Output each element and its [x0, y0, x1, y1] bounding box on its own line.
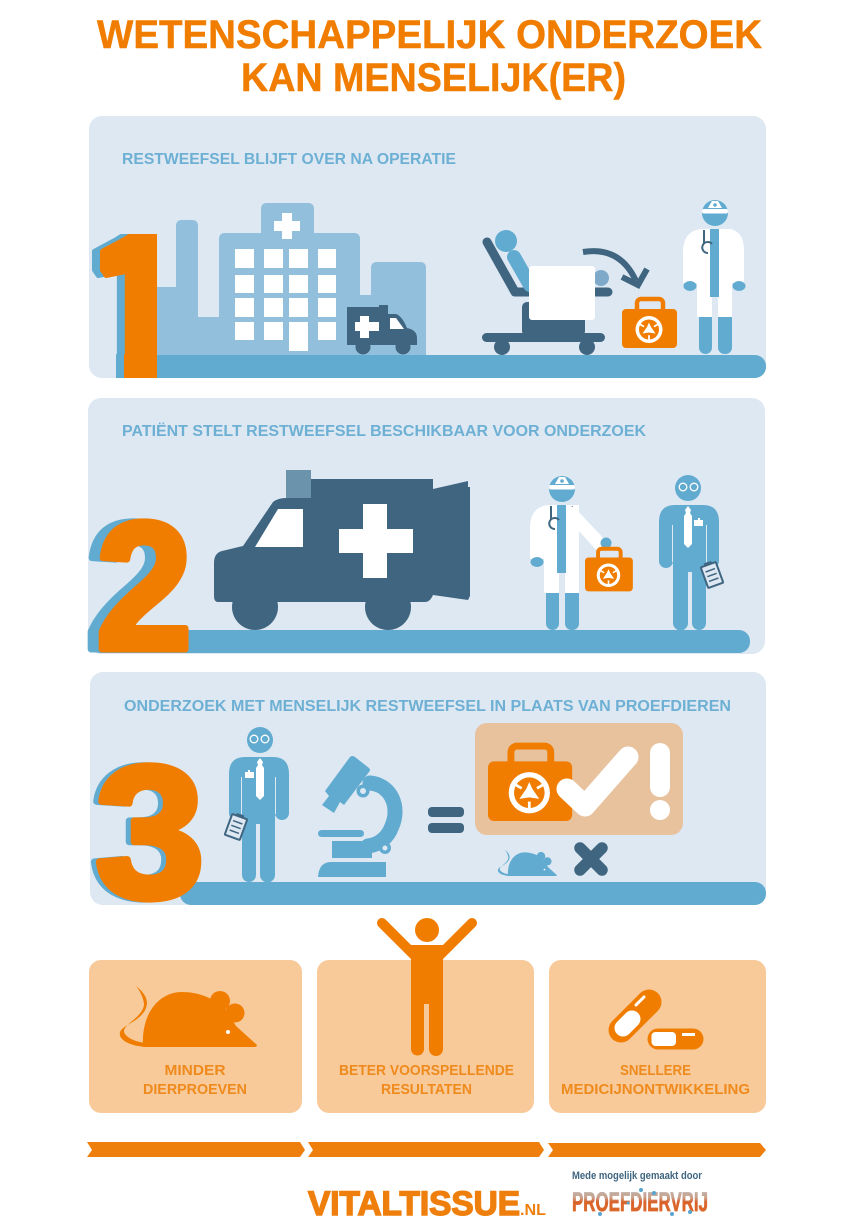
number 2: 2: [96, 484, 192, 688]
icon: recycling case: [488, 746, 572, 821]
equals sign: [428, 807, 464, 833]
number 1: [92, 234, 157, 378]
logo: proefdiervrij: [572, 1187, 708, 1217]
icon: large ambulance: [214, 470, 470, 630]
icon: doctor: [683, 200, 746, 354]
icon: recycling case: [622, 299, 677, 348]
icon: exclamation mark: [650, 743, 670, 820]
icon: researcher: [659, 475, 723, 631]
logo: proefdiervrij: PROEFDIERVRIJ: [572, 1187, 708, 1217]
label: BETER VOORSPELLENDE: [339, 1062, 514, 1079]
number 2: 2: [85, 484, 181, 688]
callout: tissue approved: [475, 723, 683, 835]
label: [339, 1062, 514, 1098]
icon: mouse: [498, 850, 557, 876]
title: [97, 13, 762, 100]
number 3: 3: [95, 727, 205, 937]
heading: step 2: PATIËNT STELT RESTWEEFSEL BESCHIKBAAR VOOR ONDERZOEK: [122, 422, 646, 440]
ground bar 2: [89, 630, 750, 653]
icon: cheering person: [382, 918, 472, 1056]
label: DIERPROEVEN: [143, 1081, 247, 1098]
icon: check mark: [567, 757, 628, 806]
label: [143, 1062, 247, 1098]
ground bar 3: [180, 882, 766, 905]
panel: step 1: [89, 116, 766, 378]
panel: better predictions: [317, 918, 534, 1113]
icon: researcher: [225, 727, 289, 883]
icon: mouse: [120, 986, 257, 1047]
panel: step 2: [85, 398, 765, 688]
panel: less animal testing: [89, 960, 302, 1113]
icon: cross: [580, 848, 602, 870]
label: MINDER: [164, 1062, 226, 1079]
label: [561, 1062, 750, 1098]
label: SNELLERE: [620, 1062, 691, 1079]
number 1: 1: [72, 193, 186, 422]
credit text: Mede mogelijk gemaakt door: [572, 1170, 703, 1182]
icon: hospital: [156, 203, 426, 355]
icon: doctor holding case: [530, 476, 633, 630]
number 3: 3: [90, 727, 200, 937]
icon: small ambulance: [347, 305, 417, 354]
icon: microscope: [318, 756, 395, 877]
heading: step 3: ONDERZOEK MET MENSELIJK RESTWEEFSEL IN PLAATS VAN PROEFDIEREN: [124, 698, 731, 715]
number 1: 1: [80, 193, 194, 422]
title: KAN MENSELIJK(ER): [241, 56, 626, 100]
arrows: progress bar: [87, 1142, 766, 1157]
heading: step 1: RESTWEEFSEL BLIJFT OVER NA OPERATIE: [122, 151, 456, 168]
title: WETENSCHAPPELIJK ONDERZOEK: [97, 13, 762, 57]
panel: step 3: [90, 672, 766, 937]
label: RESULTATEN: [381, 1081, 472, 1098]
icon: pills: [621, 997, 695, 1046]
label: MEDICIJNONTWIKKELING: [561, 1081, 750, 1098]
arrow: tissue to case: [583, 251, 647, 285]
ground bar 1: [116, 355, 766, 378]
icon: operating chair with patient: [482, 230, 609, 355]
panel: faster development: [549, 960, 766, 1113]
